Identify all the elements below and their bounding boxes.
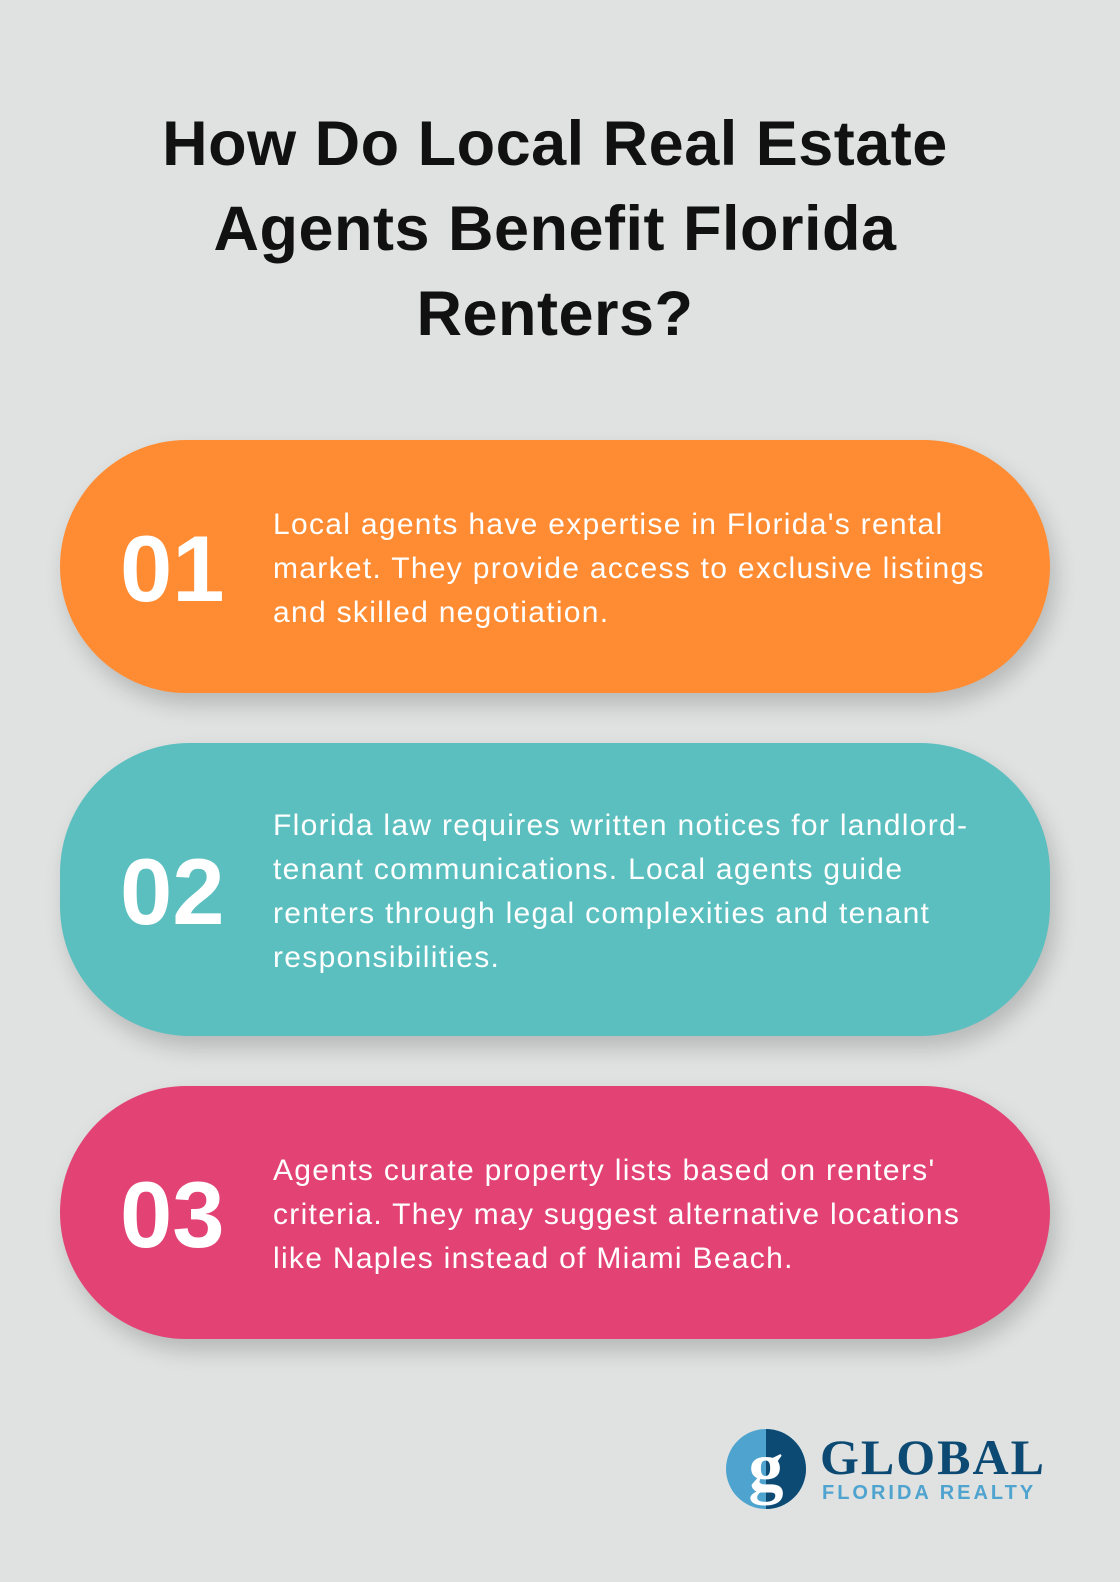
number 02: 02: [120, 838, 225, 944]
number 01: 01: [120, 516, 225, 620]
logo text: GLOBAL: [820, 1429, 1046, 1485]
title: Renters?: [416, 279, 694, 349]
text 03: Agents curate property lists based on renters' criteria. They may suggest alternative locations like Naples instead of Miami Beach.: [273, 1154, 960, 1274]
text 01: Local agents have expertise in Florida's rental market. They provide access to exclusive listings and skilled negotiation.: [273, 508, 985, 628]
title: Agents Benefit Florida: [213, 194, 897, 264]
panel: card 01: [60, 440, 1050, 693]
logo: [726, 1429, 1046, 1509]
title: How Do Local Real Estate: [162, 109, 948, 179]
panel: card 03: [60, 1086, 1050, 1339]
icon: g circle: g: [748, 1429, 784, 1506]
logo: FLORIDA REALTY: [822, 1482, 1036, 1504]
panel: card 02: [60, 743, 1050, 1036]
title: [162, 109, 948, 349]
number 03: 03: [120, 1162, 225, 1266]
icon: g circle: [726, 1429, 806, 1509]
text 02: Florida law requires written notices for landlord-tenant communications. Local agents guide renters through legal complexities and tenant responsibilities.: [273, 808, 968, 974]
